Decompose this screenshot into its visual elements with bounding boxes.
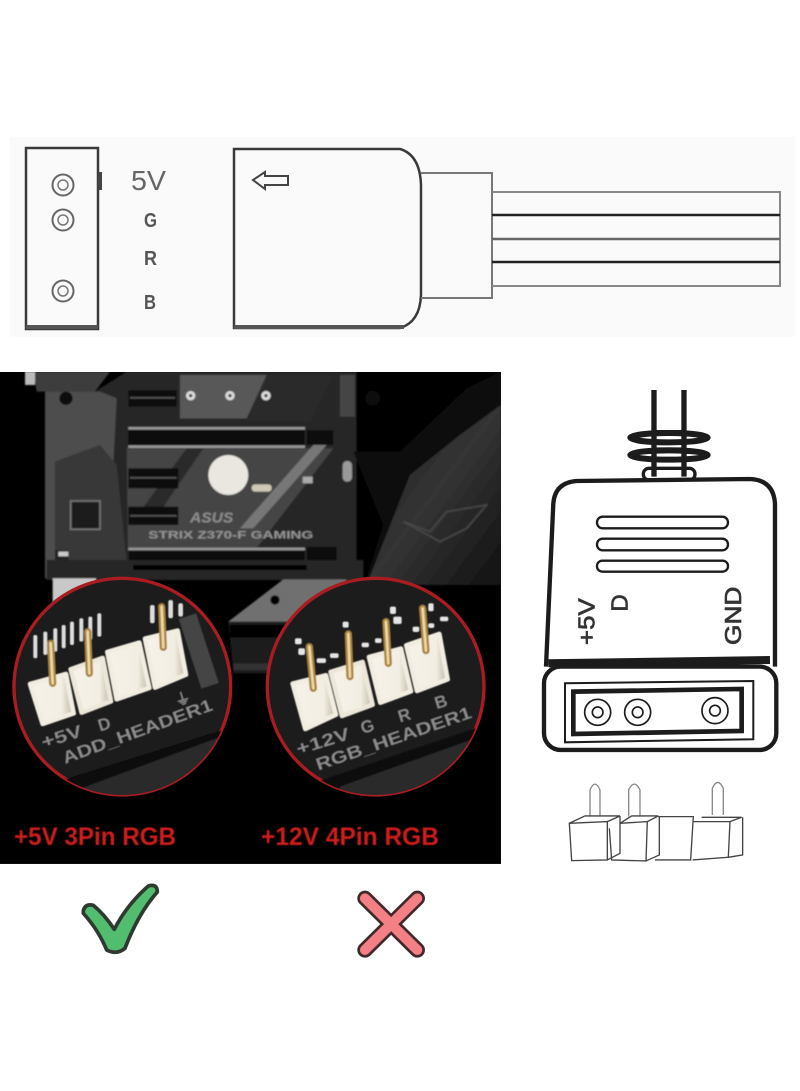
panel: 3-pin connector line drawing <box>544 390 776 861</box>
silkscreen labels: R <box>395 704 414 726</box>
rotated pin labels: +5V <box>574 597 600 645</box>
board name: ASUS <box>189 510 234 526</box>
icon: cable with ferrite rings <box>630 390 708 480</box>
silkscreen labels: G <box>358 715 377 738</box>
pin labels: 5V <box>131 165 166 196</box>
rotated pin labels <box>574 587 746 645</box>
chip <box>71 501 100 529</box>
silkscreen labels: ADD_HEADER1 <box>60 695 216 768</box>
vent slots <box>597 517 728 572</box>
circle callout: ADD header <box>12 576 232 797</box>
lower board detail <box>47 560 363 673</box>
pin labels: R <box>144 248 157 270</box>
icon: green check mark <box>83 885 157 952</box>
connector body <box>546 479 775 667</box>
silkscreen labels: D <box>95 713 113 735</box>
pin labels: B <box>144 292 156 314</box>
icon: connector plug side view with wires <box>234 149 780 329</box>
motherboard <box>25 372 501 585</box>
gold pins <box>309 608 426 688</box>
white header blocks <box>30 631 186 724</box>
rotated pin labels: D <box>607 594 633 612</box>
motherboard: STRIX Z370-F GAMING <box>148 529 313 541</box>
icon: arrow <box>253 172 288 189</box>
silkscreen labels: ⏚ <box>173 689 193 710</box>
rotated pin labels: GND <box>720 587 746 645</box>
connector face <box>544 660 776 750</box>
silkscreen labels: +12V <box>294 723 353 759</box>
infographic canvas <box>0 146 781 958</box>
icon: red cross mark <box>365 898 417 950</box>
PCIe slots <box>128 390 337 568</box>
circle callout: RGB header <box>266 576 486 797</box>
panel: top connector diagram <box>10 137 795 337</box>
silkscreen labels <box>39 689 216 768</box>
caption: +5V 3Pin RGB: +5V 3Pin RGB <box>14 823 176 851</box>
silkscreen labels: +5V <box>39 721 85 752</box>
panel: motherboard photo <box>0 372 501 864</box>
pin labels: G <box>144 210 157 232</box>
icon: connector end face <box>26 148 102 329</box>
silkscreen labels: B <box>432 690 450 713</box>
gold pins <box>51 607 163 683</box>
icon: pin header <box>569 782 743 861</box>
silkscreen labels: RGB_HEADER1 <box>313 702 474 774</box>
white header blocks <box>293 634 448 729</box>
ROG panel <box>367 405 501 585</box>
pin labels <box>131 165 166 314</box>
caption: +12V 4Pin RGB: +12V 4Pin RGB <box>261 823 439 851</box>
battery <box>208 455 248 495</box>
silkscreen labels <box>296 695 472 770</box>
